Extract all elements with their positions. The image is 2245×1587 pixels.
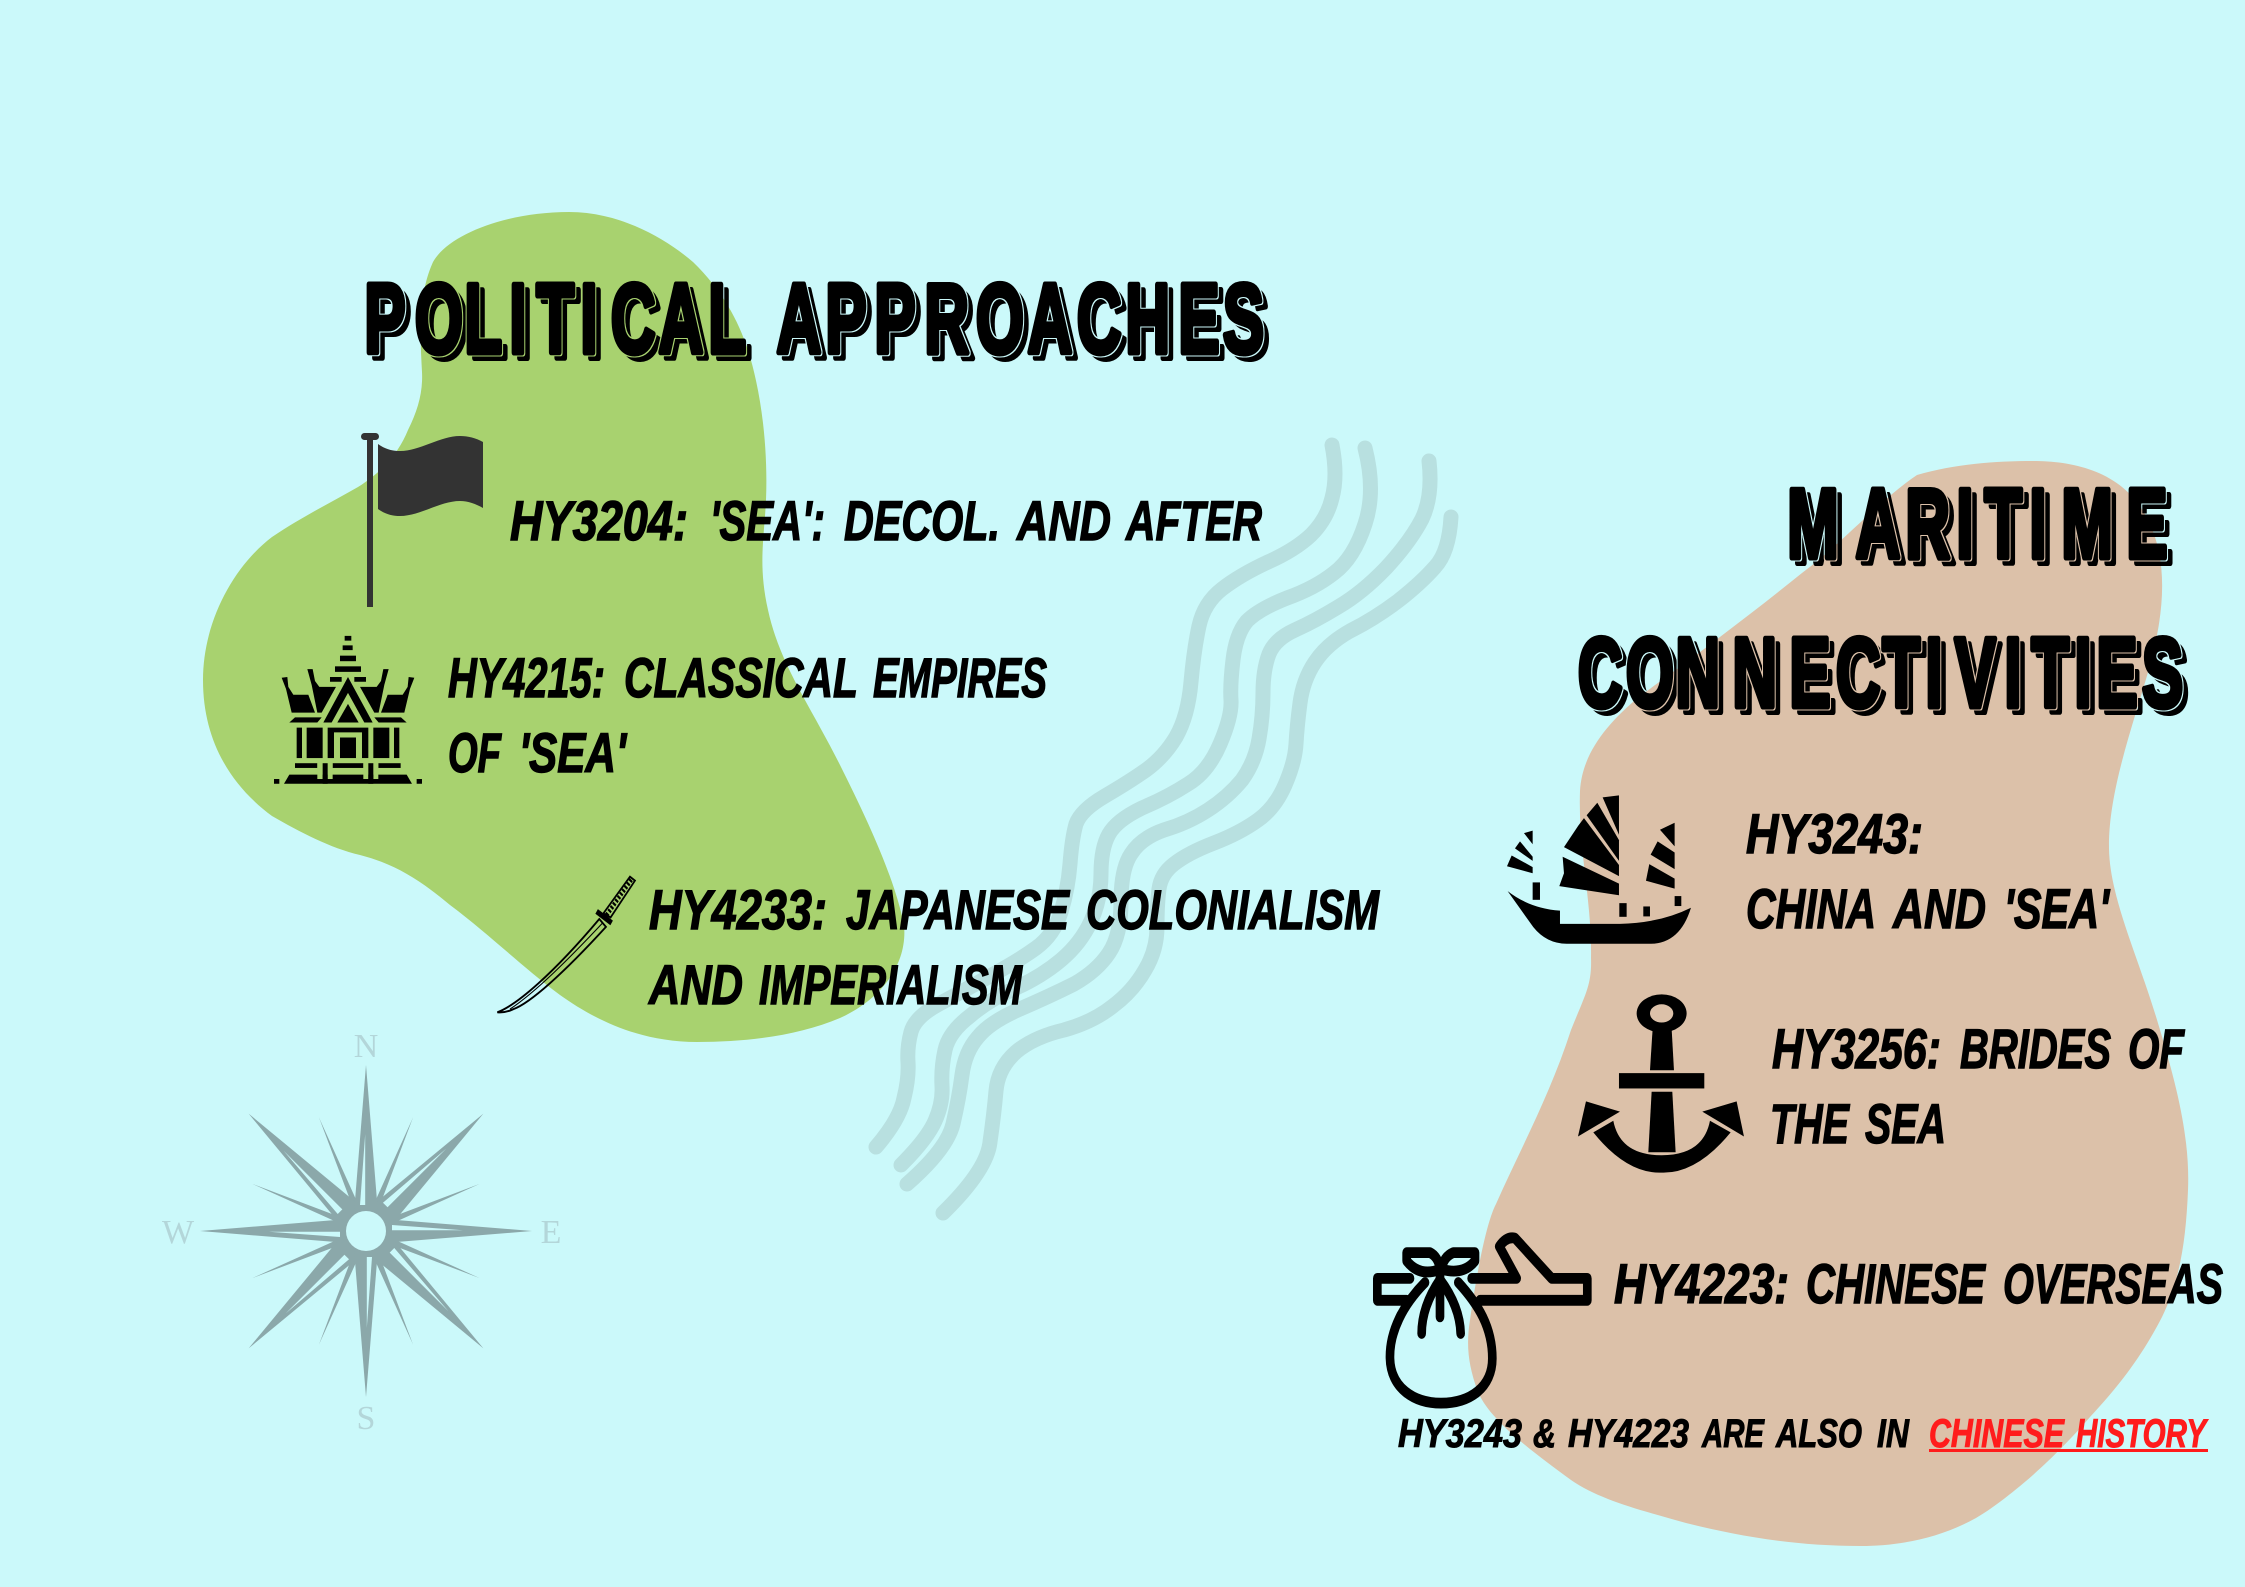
heading: political approaches: POLITICAL — [364, 265, 746, 374]
icon: compass rose: E — [541, 1214, 561, 1251]
note: also in Chinese history: & — [1533, 1412, 1556, 1456]
icon: flag — [361, 433, 483, 607]
panel: maritime connectivities — [1377, 461, 2223, 1546]
text: HY4233: AND — [647, 953, 743, 1016]
text: HY4223: HY4223: — [1614, 1252, 1789, 1315]
text: HY4215: CLASSICAL — [624, 646, 858, 709]
text: HY4215: HY4215: — [448, 646, 605, 709]
text: HY4233: COLONIALISM — [1086, 878, 1380, 941]
text: HY3256: HY3256: — [1772, 1017, 1941, 1080]
text: HY3204: DECOL. — [844, 489, 1000, 552]
icon: bundle on stick — [1377, 1238, 1587, 1403]
text: HY3243: CHINA — [1746, 877, 1876, 940]
text: HY3204: AFTER — [1125, 489, 1262, 552]
text: HY3256: THE — [1770, 1092, 1850, 1155]
note: also in Chinese history: ALSO — [1775, 1412, 1862, 1456]
heading: political approaches: APPROACHES — [777, 265, 1264, 374]
heading: maritime connectivities — [1578, 470, 2183, 728]
text: HY4215: EMPIRES — [873, 646, 1047, 709]
text: HY3256 — [1770, 1017, 2185, 1155]
icon: compass rose — [162, 1028, 561, 1437]
text: HY4223: CHINESE — [1806, 1252, 1986, 1315]
heading: maritime connectivities: CONNECTIVITIES — [1578, 619, 2183, 728]
note: also in Chinese history: HY4223 — [1568, 1412, 1689, 1456]
text: HY3243: 'SEA' — [2004, 877, 2110, 940]
panel: political approaches — [203, 212, 1380, 1042]
text: HY4215: OF — [448, 721, 502, 784]
text: HY3204 — [510, 489, 1262, 552]
note: also in Chinese history: CHINESE — [1929, 1412, 2065, 1456]
text: HY3243: HY3243: — [1746, 802, 1923, 865]
icon: compass rose: N — [354, 1028, 378, 1065]
text: HY4233: IMPERIALISM — [759, 953, 1023, 1016]
text: HY3243 — [1746, 802, 2110, 940]
note: also in Chinese history: ARE — [1701, 1412, 1765, 1456]
text: HY3243: AND — [1891, 877, 1986, 940]
note: also in Chinese history — [1398, 1412, 2208, 1456]
note: also in Chinese history: HY3243 — [1398, 1412, 1522, 1456]
text: HY4233: HY4233: — [649, 878, 827, 941]
text: HY4223 — [1614, 1252, 2223, 1315]
text: HY4215 — [448, 646, 1047, 784]
text: HY3256: SEA — [1865, 1092, 1946, 1155]
text: HY3204: 'SEA': — [710, 489, 825, 552]
text: HY4233: JAPANESE — [846, 878, 1070, 941]
icon: anchor — [1578, 994, 1744, 1173]
heading: political approaches — [364, 265, 1264, 374]
waves decoration — [876, 445, 1451, 1213]
icon: katana — [497, 877, 635, 1012]
text: HY4233 — [647, 878, 1380, 1016]
icon: junk ship — [1507, 795, 1691, 944]
text: HY3204: AND — [1015, 489, 1111, 552]
icon: temple — [274, 636, 422, 784]
heading: maritime connectivities: MARITIME — [1787, 470, 2168, 579]
text: HY3256: BRIDES — [1960, 1017, 2111, 1080]
text: HY3256: OF — [2128, 1017, 2185, 1080]
icon: compass rose: W — [162, 1214, 195, 1251]
text: HY4215: 'SEA' — [519, 721, 627, 784]
note: also in Chinese history: IN — [1877, 1412, 1910, 1456]
text: HY3204: HY3204: — [510, 489, 688, 552]
icon: compass rose: S — [357, 1400, 375, 1437]
